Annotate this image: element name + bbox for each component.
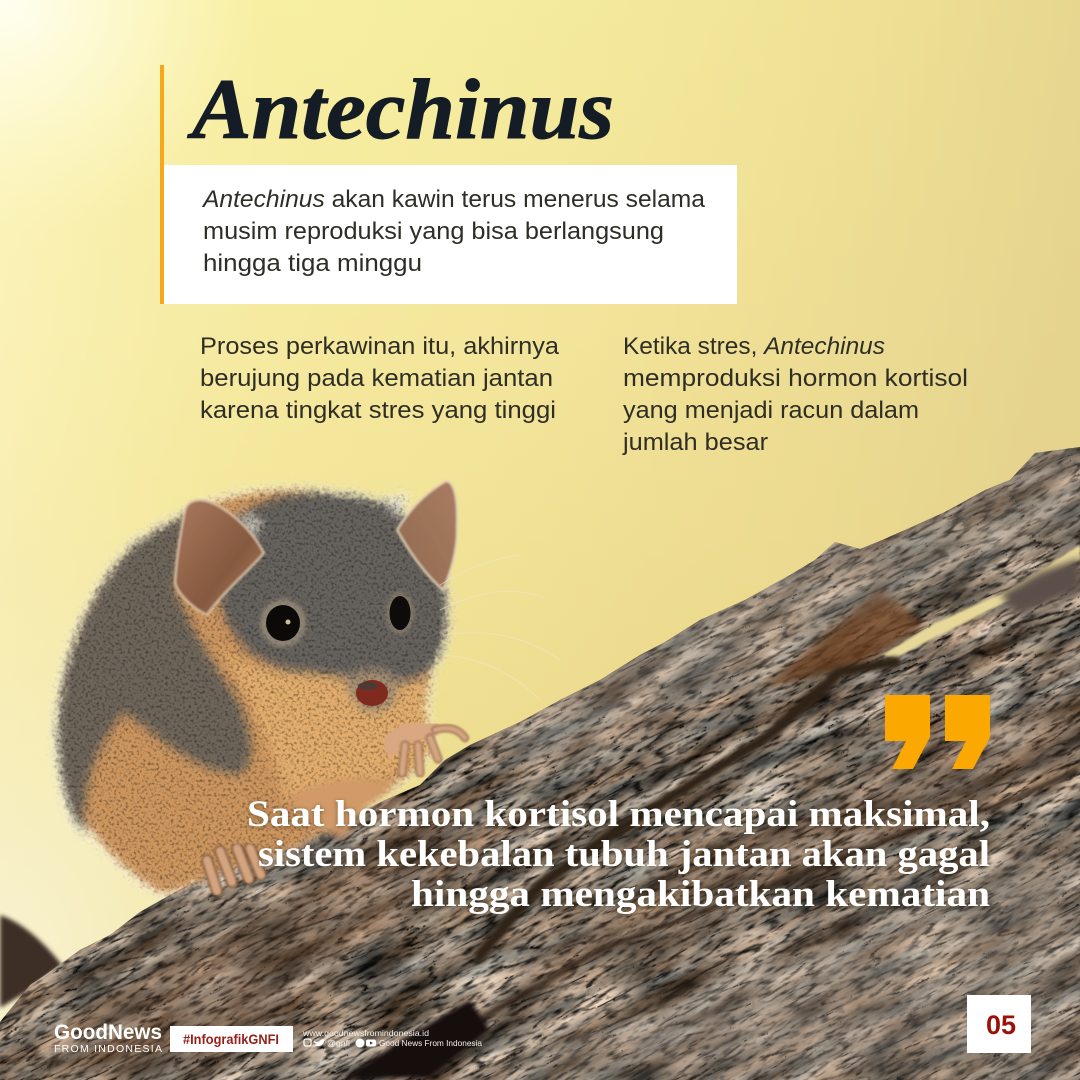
animal: antechinus	[55, 481, 560, 897]
body and fur	[55, 487, 449, 897]
quote text: hingga mengakibatkan kematian	[411, 874, 990, 915]
right ear	[397, 481, 457, 590]
right text column: yang menjadi racun dalam	[623, 397, 919, 424]
quote text: Saat hormon kortisol mencapai maksimal,	[247, 794, 990, 835]
icon: facebook	[356, 1038, 364, 1048]
log shading: brown zones	[0, 450, 1080, 1080]
accent bar	[160, 65, 164, 304]
intro text: musim reproduksi yang bisa berlangsung	[203, 218, 664, 245]
page number: 05	[986, 1010, 1016, 1040]
intro text	[201, 186, 705, 277]
left foot	[207, 848, 261, 891]
hashtag label	[170, 1026, 293, 1052]
dark branch stub at lower left	[0, 915, 62, 1008]
right paw	[392, 728, 465, 773]
icon: youtube	[366, 1040, 376, 1046]
icon: twitter	[314, 1039, 325, 1046]
left eye	[260, 599, 306, 647]
whiskers	[440, 555, 560, 700]
left text column: Proses perkawinan itu, akhirnya	[200, 333, 559, 360]
tree log with bark texture	[0, 447, 1080, 1080]
website and socials: www.goodnewsfromindonesia.id	[302, 1028, 429, 1038]
lower crack	[478, 770, 1078, 1020]
quote text	[247, 794, 990, 915]
right text column	[622, 333, 968, 456]
nose	[356, 680, 388, 706]
website and socials	[302, 1028, 482, 1048]
title: Antechinus	[187, 61, 614, 157]
hole in the bark, bottom	[345, 1000, 490, 1078]
dark lump at right of the gap	[1000, 558, 1080, 615]
left text column: berujung pada kematian jantan	[200, 365, 553, 392]
white intro box	[164, 165, 737, 304]
right eye	[386, 592, 414, 634]
intro text: hingga tiga minggu	[203, 250, 422, 277]
icon: quotation marks	[885, 695, 990, 769]
left ear	[175, 500, 264, 615]
logo: GoodNews From Indonesia	[54, 1021, 162, 1055]
website and socials: @gnfi	[327, 1038, 350, 1048]
right text column: memproduksi hormon kortisol	[623, 365, 968, 392]
left text column: karena tingkat stres yang tinggi	[200, 397, 556, 424]
footer	[54, 1021, 482, 1055]
logo: GoodNews From Indonesia: GoodNews	[54, 1021, 162, 1044]
hashtag label: #InfografikGNFI	[183, 1032, 279, 1047]
icon: instagram	[304, 1039, 311, 1046]
dark crack between upper and middle logs	[480, 662, 895, 955]
right text column: Ketika stres, Antechinus	[623, 333, 885, 360]
intro text: Antechinus akan kawin terus menerus selama	[201, 186, 705, 213]
quote text: sistem kekebalan tubuh jantan akan gagal	[258, 834, 990, 875]
logo: GoodNews From Indonesia: FROM INDONESIA	[54, 1043, 162, 1055]
arm on log	[290, 778, 395, 838]
right text column: jumlah besar	[622, 429, 768, 456]
gap between log sections showing background	[882, 545, 1080, 658]
page number	[967, 995, 1031, 1053]
website and socials: Good News From Indonesia	[379, 1038, 482, 1048]
left text column	[200, 333, 559, 424]
